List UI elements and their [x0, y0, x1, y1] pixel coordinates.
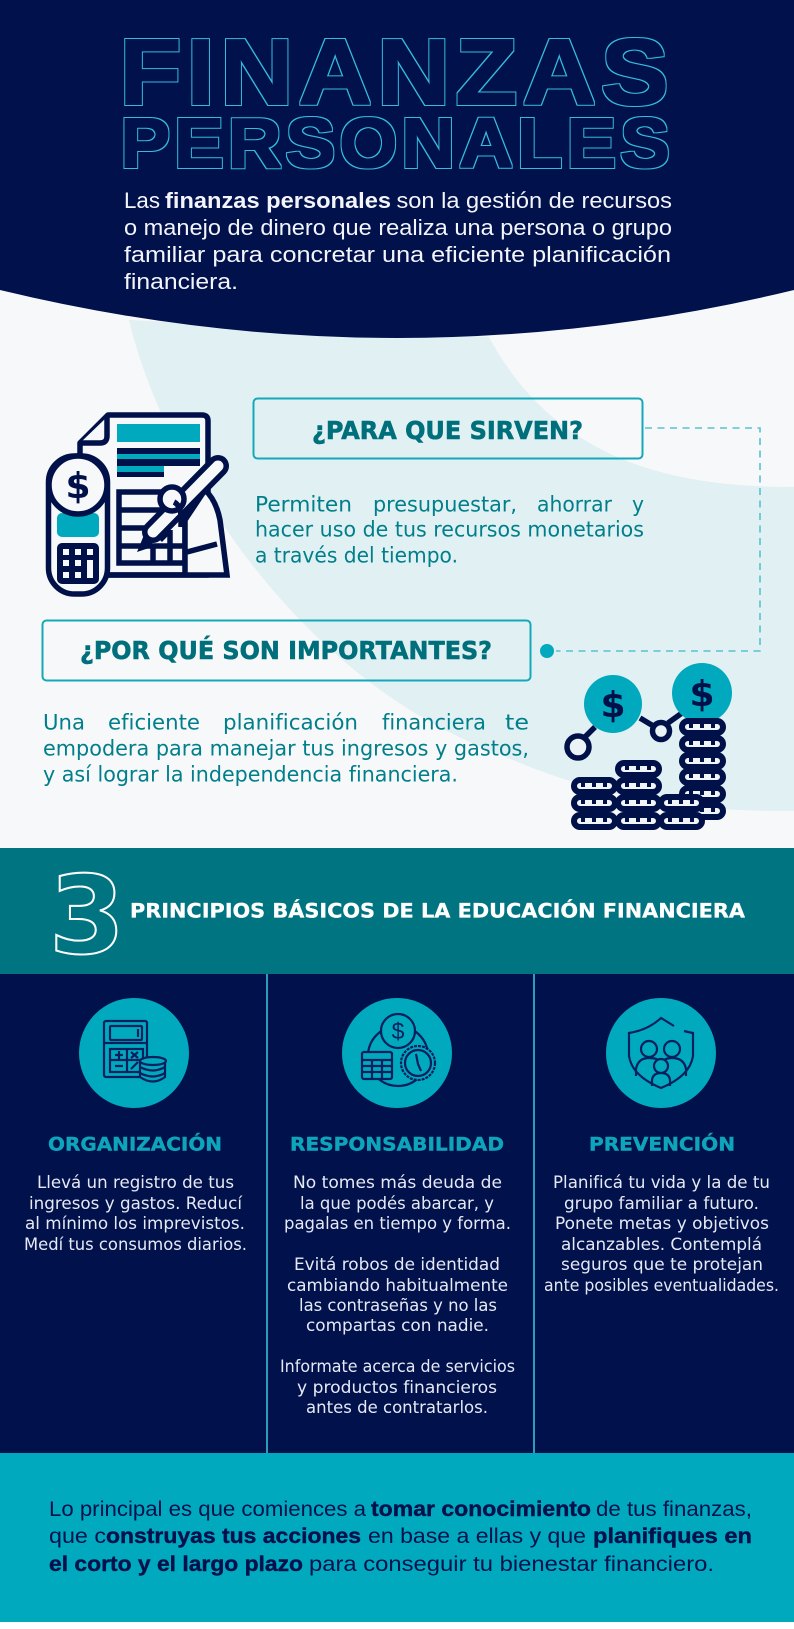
column text: grupo familiar a futuro.: [564, 1194, 759, 1213]
panel: header: [0, 0, 794, 338]
text block: ahorrar: [537, 492, 612, 516]
icon: budget document and calculator: [48, 415, 227, 594]
conclusion text: tomar conocimiento: [371, 1497, 591, 1521]
panel: prevencion: [544, 998, 779, 1295]
column text: las contraseñas y no las: [299, 1296, 497, 1315]
column text: la que podés abarcar, y: [300, 1194, 494, 1213]
panel: principles background: [0, 974, 794, 1453]
column text: Planificá tu vida y la de tu: [553, 1173, 770, 1192]
icon: family shield: [606, 998, 716, 1108]
conclusion text: onstruyas tus acciones: [106, 1524, 361, 1548]
conclusion text: el corto y el largo plazo: [49, 1552, 303, 1576]
icon: coins and growth line: $: [600, 685, 626, 726]
conclusion text: en base a ellas y que: [368, 1524, 586, 1548]
banner heading: PRINCIPIOS BÁSICOS DE LA EDUCACIÓN FINANCIERA: [130, 898, 745, 922]
panel: para que sirven: [254, 398, 644, 568]
column heading: PREVENCIÓN: [589, 1132, 735, 1156]
dashed connector: [540, 428, 760, 658]
heading box: [42, 620, 530, 680]
text block: Una: [43, 710, 85, 734]
title: FINANZAS: [120, 20, 674, 124]
column text: cambiando habitualmente: [287, 1276, 508, 1295]
panel: organizacion: [24, 998, 247, 1254]
panel: conclusion: [0, 1453, 794, 1629]
text block: a través del tiempo.: [255, 544, 458, 568]
conclusion text: Lo principal es que comiences a: [49, 1497, 366, 1521]
column text: al mínimo los imprevistos.: [25, 1214, 245, 1233]
intro text: finanzas personales: [165, 188, 391, 213]
intro text: o manejo de dinero que realiza una persona o grupo: [124, 215, 672, 240]
text block: presupuestar,: [373, 492, 517, 516]
panel: responsabilidad: [280, 998, 515, 1417]
text block: te: [505, 710, 529, 734]
column text: [544, 1173, 779, 1295]
intro text: son la gestión de recursos: [396, 188, 672, 213]
heading box: ¿PARA QUE SIRVEN?: [312, 416, 583, 445]
numeral 3: 3: [49, 854, 125, 979]
intro text: financiera.: [124, 269, 238, 294]
column text: Informate acerca de servicios: [280, 1357, 515, 1376]
text block: eficiente: [108, 710, 200, 734]
pale decorative band: [129, 320, 794, 811]
column text: Evitá robos de identidad: [294, 1255, 500, 1274]
panel: por que son importantes: [42, 620, 530, 786]
text block: empodera para manejar tus ingresos y gastos,: [43, 736, 529, 760]
conclusion text: [49, 1497, 752, 1576]
icon: coin, calendar and clock: $: [392, 1018, 405, 1044]
column text: Medí tus consumos diarios.: [24, 1235, 247, 1254]
text block: Permiten: [255, 492, 352, 516]
text block: [255, 492, 644, 568]
heading box: [254, 398, 642, 458]
column text: ante posibles eventualidades.: [544, 1276, 779, 1295]
heading box: ¿POR QUÉ SON IMPORTANTES?: [80, 636, 492, 665]
icon: calculator and coins: [79, 998, 189, 1108]
text block: hacer uso de tus recursos monetarios: [255, 518, 644, 542]
text block: [43, 710, 529, 786]
column heading: ORGANIZACIÓN: [48, 1132, 222, 1156]
text block: y así lograr la independencia financiera.: [43, 762, 458, 786]
column text: antes de contratarlos.: [306, 1398, 488, 1417]
column text: Ponete metas y objetivos: [555, 1214, 769, 1233]
text block: planificación: [223, 710, 358, 734]
conclusion text: para conseguir tu bienestar financiero.: [309, 1552, 714, 1576]
column text: Llevá un registro de tus: [37, 1173, 234, 1192]
column text: [280, 1173, 515, 1417]
column text: y productos financieros: [297, 1378, 497, 1397]
conclusion text: de tus finanzas,: [596, 1497, 752, 1521]
intro text: [124, 188, 672, 294]
icon: coin, calendar and clock: [342, 998, 452, 1108]
intro text: Las: [124, 188, 160, 213]
title: PERSONALES: [120, 104, 674, 182]
column text: ingresos y gastos. Reducí: [29, 1194, 243, 1213]
panel: principios banner: [0, 848, 794, 979]
text block: financiera: [382, 710, 486, 734]
conclusion text: planifiques en: [593, 1524, 752, 1548]
icon: coins and growth line: $: [689, 674, 715, 715]
column heading: RESPONSABILIDAD: [290, 1134, 504, 1156]
text block: y: [632, 492, 644, 516]
conclusion text: que c: [49, 1524, 106, 1548]
column text: [24, 1173, 247, 1254]
column text: No tomes más deuda de: [293, 1173, 502, 1192]
title: [120, 20, 674, 182]
icon: coins and growth line: [567, 663, 732, 827]
column text: seguros que te protejan: [561, 1255, 763, 1274]
column text: compartas con nadie.: [306, 1316, 489, 1335]
intro text: familiar para concretar una eficiente planificación: [124, 242, 671, 267]
column text: pagalas en tiempo y forma.: [284, 1214, 511, 1233]
icon: budget document and calculator: $: [65, 466, 91, 507]
column text: alcanzables. Contemplá: [561, 1235, 762, 1254]
